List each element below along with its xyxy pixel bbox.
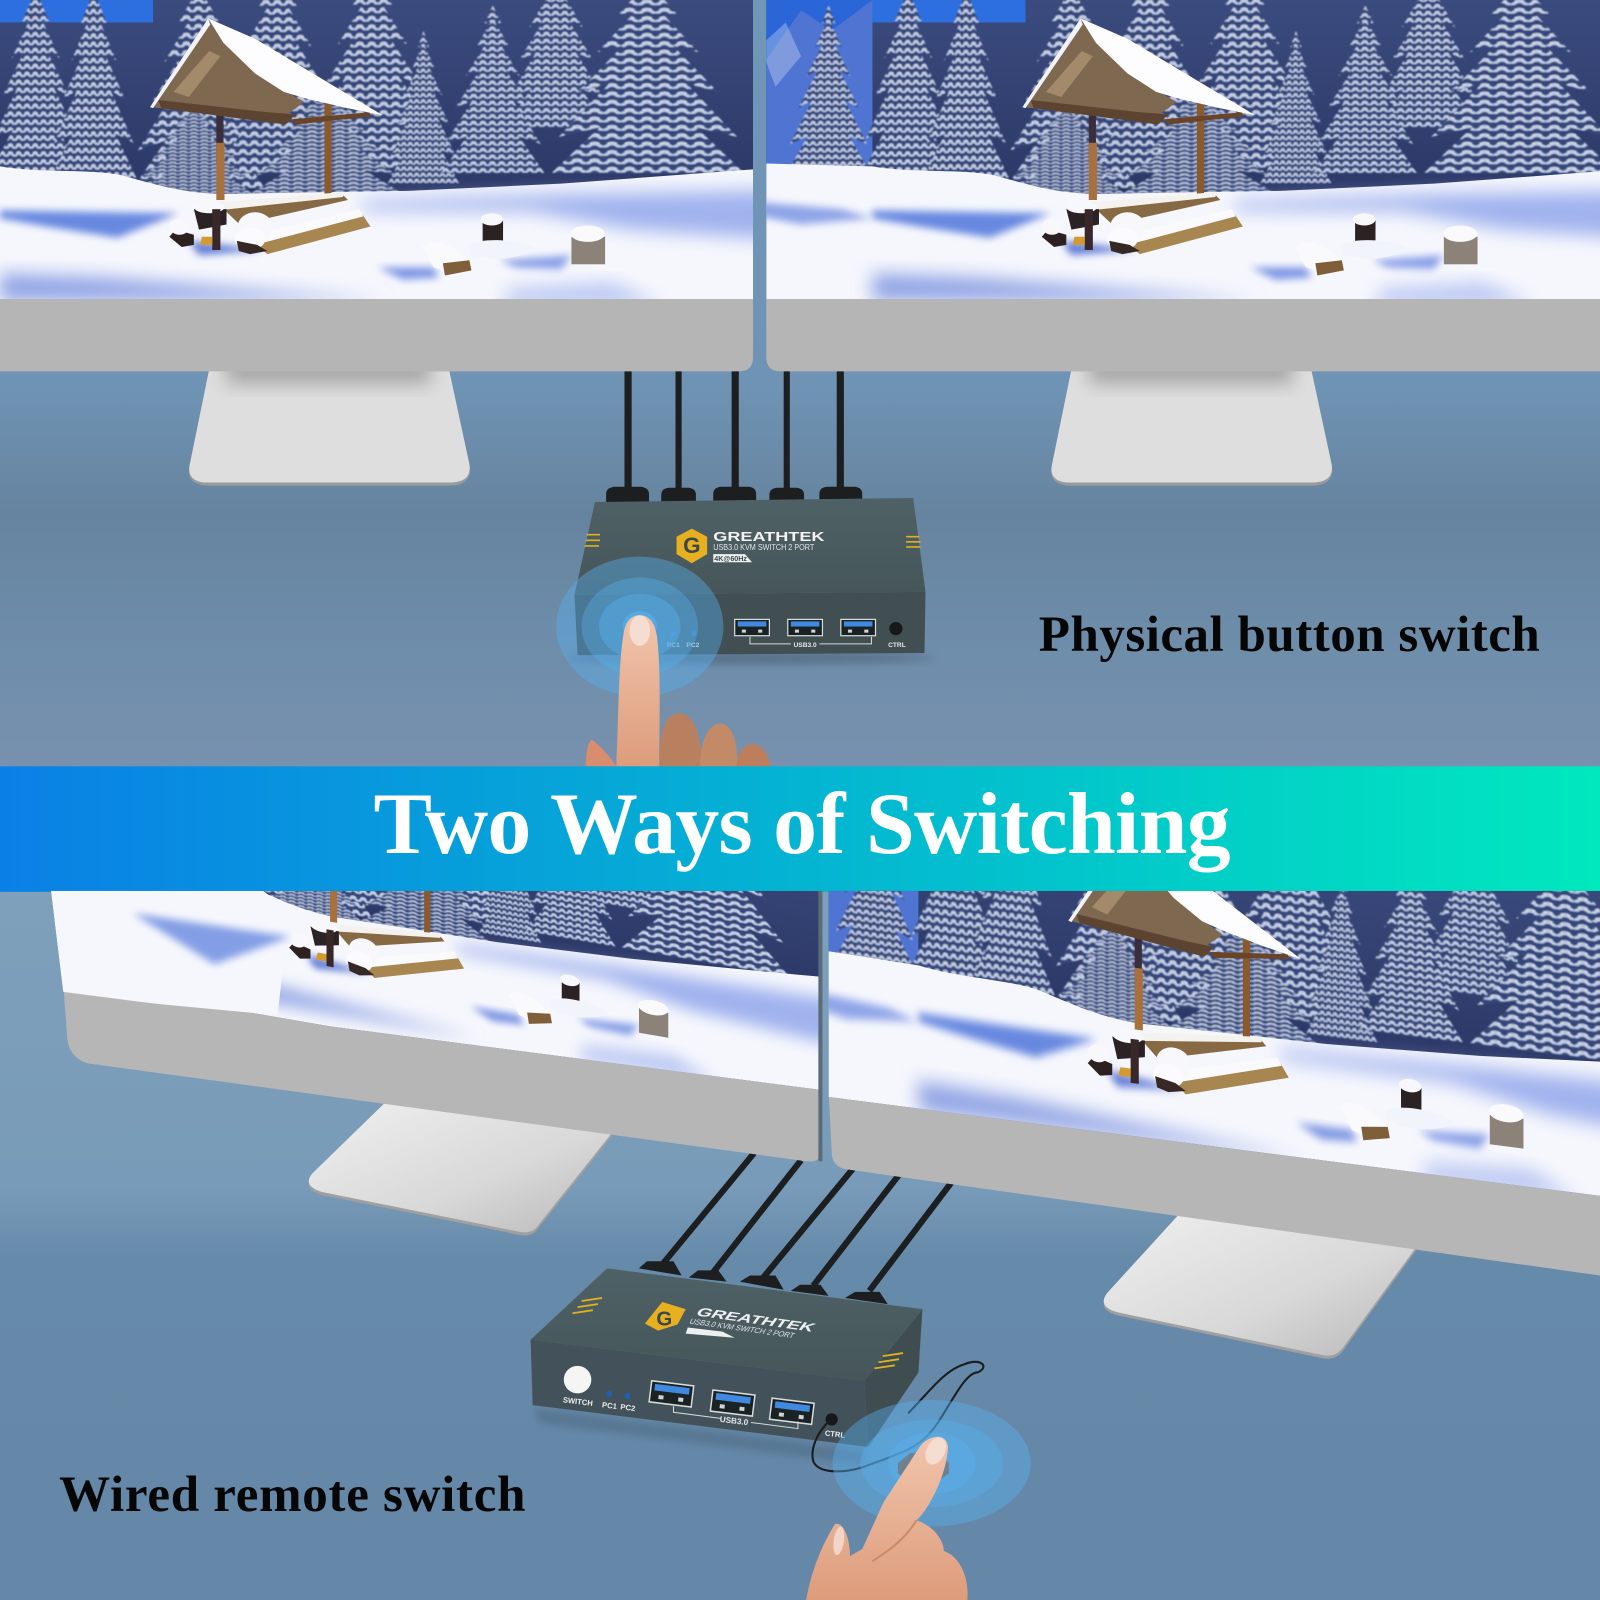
- logo hexagon: G: [683, 533, 701, 558]
- KVM switch: top view: [566, 498, 934, 664]
- label: wired remote switch: Wired remote switch: [59, 1467, 526, 1523]
- USB3.0 bracket and label: [750, 637, 871, 649]
- cable connectors: bottom group: [639, 1261, 888, 1304]
- cables: top group: [606, 369, 862, 502]
- monitor: bottom left: [51, 890, 822, 1162]
- monitor: top left: [0, 0, 753, 372]
- monitor: top right: [758, 0, 1600, 371]
- USB ports: [649, 1381, 814, 1424]
- PC1 PC2 labels: PC1: [667, 642, 680, 649]
- resolution tag: 4K@60Hz: [714, 555, 747, 563]
- remote wire: [812, 1362, 983, 1471]
- brand text: GREATHTEK: [693, 1305, 819, 1334]
- logo: [645, 1302, 686, 1331]
- KVM switch: angled view: [531, 1268, 922, 1464]
- brand text: GREATHTEK: [713, 529, 826, 544]
- monitor: bottom right: [828, 890, 1600, 1276]
- label: physical button switch: Physical button switch: [1039, 607, 1540, 663]
- USB3.0 bracket and label: [673, 1406, 798, 1429]
- switch top face: [574, 498, 926, 595]
- ripple: physical button press: [556, 557, 723, 696]
- switch front face: [574, 592, 926, 655]
- background: desk upper: [0, 0, 1600, 776]
- hand: pressing button: [586, 615, 770, 766]
- monitor bezel top left: [0, 296, 753, 371]
- monitor bezel bottom right: [829, 1090, 1600, 1276]
- title banner: [0, 766, 1600, 892]
- background: desk lower: [0, 888, 1600, 1600]
- monitor stand: top right: [1051, 371, 1332, 486]
- screen: winter scene perspective right: [828, 890, 1600, 1196]
- CTRL jack: CTRL: [888, 642, 906, 649]
- logo: G: [656, 1309, 672, 1331]
- USB3.0 bracket and label: USB3.0: [719, 1415, 749, 1427]
- model text: USB3.0 KVM SWITCH 2 PORT: [688, 1317, 796, 1340]
- yellow stripes left: [585, 535, 600, 546]
- monitor edge: [818, 891, 822, 1161]
- switch button: [562, 1366, 593, 1408]
- title: Two Ways of Switching: [373, 775, 1231, 872]
- monitor stand: bottom right: [1104, 1209, 1416, 1359]
- USB ports: [735, 619, 876, 636]
- CTRL jack: [888, 622, 906, 649]
- switch front face: [531, 1340, 868, 1447]
- switch side face: [864, 1309, 922, 1447]
- switch button: SWITCH: [562, 1395, 593, 1408]
- PC1 PC2 labels: [667, 631, 700, 649]
- hand: pressing remote: [806, 1434, 968, 1600]
- wired remote puck: [898, 1453, 949, 1482]
- PC1 indicator: [602, 1391, 618, 1411]
- yellow stripes right: [906, 537, 920, 547]
- monitor bezel top right: [766, 296, 1600, 371]
- CTRL jack: [826, 1413, 838, 1426]
- switch top face: [531, 1268, 922, 1381]
- PC1 PC2 labels: PC2: [686, 642, 700, 649]
- cables: bottom group: [663, 1153, 952, 1291]
- monitor bezel bottom left: [63, 985, 822, 1162]
- ripple: wired remote press: [833, 1400, 1031, 1527]
- PC2 indicator: [620, 1393, 636, 1413]
- screen: winter scene left: [0, 0, 753, 299]
- monitor stand: bottom left: [309, 1102, 612, 1235]
- model text: USB3.0 KVM SWITCH 2 PORT: [713, 543, 814, 552]
- PC2 indicator: PC2: [620, 1402, 636, 1413]
- screen: winter scene right: [758, 0, 1600, 316]
- yellow stripes: [572, 1298, 903, 1368]
- resolution tag: [686, 1328, 735, 1338]
- USB3.0 bracket and label: USB3.0: [794, 642, 817, 649]
- logo hexagon: [677, 529, 707, 563]
- CTRL label: CTRL: [824, 1429, 846, 1440]
- PC1 indicator: PC1: [602, 1400, 618, 1411]
- monitor stand: top left: [189, 371, 470, 486]
- screen: winter scene perspective left: [51, 890, 818, 1090]
